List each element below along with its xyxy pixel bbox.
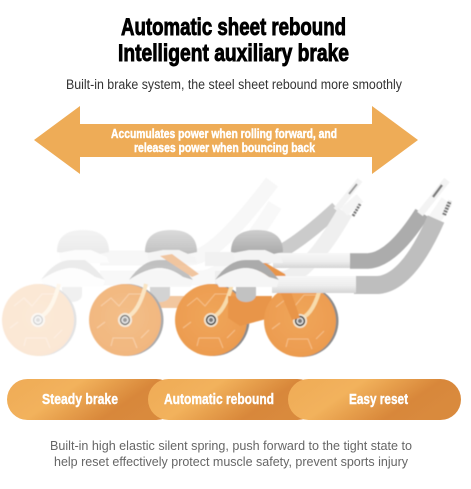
- description: help reset effectively protect muscle safety, prevent sports injury: [54, 454, 408, 469]
- pill: steady brake: Steady brake: [42, 391, 118, 408]
- subtitle: Built-in brake system, the steel sheet rebound more smoothly: [66, 77, 402, 92]
- description: [50, 438, 412, 469]
- second ghost wheel and body: [89, 230, 200, 356]
- pill: automatic rebound: [148, 379, 318, 420]
- arrow caption: releases power when bouncing back: [134, 141, 315, 155]
- arrow caption: Accumulates power when rolling forward, and: [111, 127, 337, 141]
- description: Built-in high elastic silent spring, push forward to the tight state to: [50, 438, 412, 453]
- double-headed arrow: [34, 106, 418, 174]
- front roller lower handle: [272, 201, 450, 293]
- middle roller handles: [205, 180, 360, 279]
- front roller body: [215, 230, 283, 302]
- pill: steady brake: [7, 379, 177, 420]
- product illustration: ab roller motion sequence: [2, 180, 450, 357]
- ghost roller, faintest position: [2, 182, 275, 356]
- feature pills: [7, 379, 461, 420]
- front roller upper handle: [273, 180, 447, 268]
- pill: easy reset: [288, 379, 461, 420]
- title: Automatic sheet rebound: [121, 14, 346, 41]
- pill: easy reset: Easy reset: [349, 391, 408, 408]
- title: Intelligent auxiliary brake: [118, 40, 349, 67]
- pill: automatic rebound: Automatic rebound: [164, 391, 274, 408]
- arrow caption: [111, 127, 337, 155]
- front roller wheels: [175, 254, 338, 357]
- title: [118, 14, 349, 67]
